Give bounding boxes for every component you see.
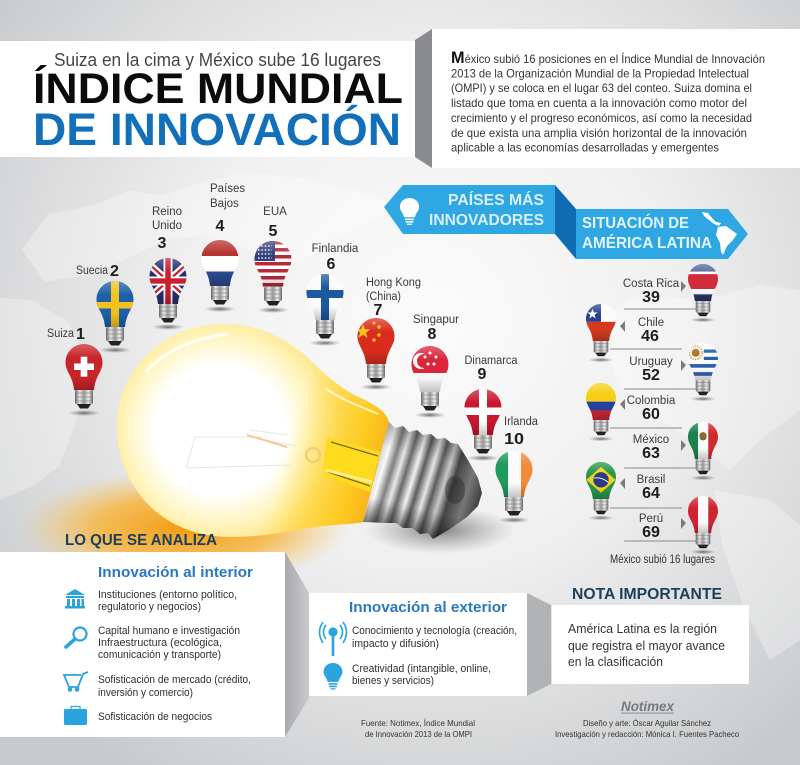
label: Finlandia 6 — [312, 243, 359, 273]
panel: nota importante — [552, 605, 749, 684]
Latin America: Brasil: 64 — [642, 485, 660, 502]
icon: Latin America map — [702, 212, 737, 255]
label: Reino Unido 3: Unido — [152, 220, 182, 232]
big light bulb — [117, 324, 515, 554]
Latin America: Colombia: 60 — [642, 406, 660, 423]
icon: magnifying glass — [66, 628, 86, 647]
panel: nota importante: que registra el mayor avance — [568, 638, 725, 653]
Latin America: Costa Rica: 39 — [642, 289, 660, 306]
label: EUA 5 — [263, 206, 287, 240]
Latin America: Perú: Perú — [639, 513, 663, 525]
panel: innovación al exterior: Conocimiento y tecnología (creación, — [352, 625, 517, 637]
label: Singapur 8: 8 — [428, 326, 437, 343]
panel: intro text: aplicable a las economías desarrolladas y emergentes — [451, 142, 719, 154]
title line 1: ÍNDICE MUNDIAL — [33, 65, 403, 113]
label: Hong Kong (China) 7: Hong Kong — [366, 277, 421, 289]
bulb screw base — [363, 422, 482, 539]
label: Suiza 1: 1 — [76, 326, 85, 343]
panel: innovación al interior: Innovación al interior — [98, 564, 253, 581]
icon: light bulb — [400, 198, 419, 225]
panel: intro text: listado que toma en cuenta a la innovación como motor del — [451, 97, 747, 110]
source credit: Fuente: Notimex, Índice Mundial — [361, 718, 475, 728]
bulb 7: Hong Kong (China) — [356, 318, 395, 390]
title line 2: DE INNOVACIÓN — [33, 104, 401, 155]
Latin America: Chile: 46 — [641, 328, 659, 345]
banner: países más innovadores — [384, 185, 576, 259]
label: EUA 5: 5 — [269, 223, 278, 240]
panel: innovación al interior: comunicación y transporte) — [98, 649, 221, 661]
panel: innovación al interior: inversión y comercio) — [98, 687, 193, 699]
banner: países más innovadores: PAÍSES MÁS — [448, 190, 544, 209]
Latin America: México — [624, 422, 719, 480]
source credit: de Innovación 2013 de la OMPI — [365, 729, 472, 739]
panel: nota importante: América Latina es la región — [568, 621, 717, 636]
label: Finlandia 6: Finlandia — [312, 243, 359, 255]
heading: lo que se analiza: LO QUE SE ANALIZA — [65, 532, 217, 549]
label: Finlandia 6: 6 — [327, 256, 336, 273]
panel: innovación al interior: regulatorio y negocios) — [98, 601, 201, 613]
panel: nota importante: en la clasificación — [568, 654, 663, 669]
bulb 6: Finlandia — [306, 274, 344, 346]
bulb 2: Suecia — [96, 281, 134, 353]
bulb 5: EUA — [254, 241, 292, 313]
design credits — [555, 718, 739, 739]
banner: países más innovadores: INNOVADORES — [429, 212, 544, 229]
label: Dinamarca 9: Dinamarca — [464, 355, 518, 367]
heading: nota importante: NOTA IMPORTANTE — [572, 586, 722, 603]
banner: situación de América Latina: SITUACIÓN DE — [582, 213, 689, 232]
label: Dinamarca 9 — [464, 355, 518, 383]
icon: briefcase — [64, 706, 87, 725]
panel: innovación al interior: Sofisticación de mercado (crédito, — [98, 674, 251, 686]
banner: situación de América Latina: AMÉRICA LATINA — [582, 233, 712, 252]
panel: innovación al interior: Sofisticación de negocios — [98, 711, 212, 723]
panel: intro text: crecimiento y el progreso económicos, así como la necesidad — [451, 112, 752, 125]
label: Países Bajos 4: 4 — [216, 218, 225, 235]
panel: intro text: 2013 de la Organización Mundial de la Propiedad Intelectual — [451, 68, 749, 80]
Latin America: Brasil: Brasil — [637, 474, 665, 486]
Latin America: Costa Rica — [623, 264, 718, 322]
icon: light bulb — [324, 663, 342, 689]
Latin America: México: México — [633, 434, 669, 446]
label: Reino Unido 3 — [152, 206, 182, 252]
Notimex logo: Notimex — [621, 698, 675, 714]
label: Singapur 8: Singapur — [413, 314, 459, 326]
label: Dinamarca 9: 9 — [478, 366, 487, 383]
bulb 10: Irlanda — [495, 451, 534, 523]
caption: México subió 16 lugares: México subió 16 lugares — [610, 554, 715, 566]
panel: innovación al interior: Infraestructura (ecológica, — [98, 637, 222, 649]
Latin America: Colombia: Colombia — [627, 395, 676, 407]
panel: intro text: de que exista una amplia visión horizontal de la innovación — [451, 127, 747, 140]
label: Irlanda 10: Irlanda — [504, 416, 539, 428]
label: Irlanda 10 — [504, 416, 539, 448]
label: EUA 5: EUA — [263, 206, 287, 218]
icon: shopping cart — [64, 672, 88, 691]
label: Irlanda 10: 10 — [504, 431, 524, 448]
Latin America: Colombia — [586, 383, 682, 441]
bulb 4: Países Bajos — [201, 240, 239, 312]
world map background — [0, 172, 800, 660]
label: Suiza 1: Suiza — [47, 328, 75, 340]
label: Países Bajos 4 — [210, 183, 245, 235]
label: Singapur 8 — [413, 314, 459, 343]
Latin America: Uruguay: 52 — [642, 367, 660, 384]
bulb 3: Reino Unido — [149, 258, 187, 330]
banner: situación de América Latina — [576, 209, 748, 259]
panel: innovación al interior — [0, 552, 309, 737]
label: Suecia 2: 2 — [110, 263, 119, 280]
panel: innovación al exterior: bienes y servicios) — [352, 675, 434, 687]
panel: intro text — [415, 29, 800, 168]
panel: innovación al interior: Capital humano e investigación — [98, 625, 240, 637]
panel: innovación al exterior: Innovación al exterior — [349, 599, 507, 616]
icon: antenna — [320, 622, 346, 656]
panel: innovación al exterior — [309, 593, 551, 696]
icon: institution building — [65, 589, 85, 608]
label: Hong Kong (China) 7 — [366, 277, 421, 319]
title panel — [0, 41, 415, 157]
bulb 1: Suiza — [65, 344, 103, 416]
label: Suiza 1 — [47, 326, 85, 343]
Latin America: Brasil — [586, 462, 682, 520]
label: Hong Kong (China) 7: 7 — [374, 302, 383, 319]
label: Países Bajos 4: Países — [210, 183, 245, 195]
design credits: Diseño y arte: Óscar Aguilar Sánchez — [583, 718, 711, 728]
label: Reino Unido 3: Reino — [152, 206, 182, 218]
label: Suecia 2 — [76, 263, 119, 280]
Latin America: Costa Rica: Costa Rica — [623, 278, 680, 290]
Latin America: Perú — [624, 496, 719, 554]
label: Reino Unido 3: 3 — [158, 235, 167, 252]
subtitle: Suiza en la cima y México sube 16 lugares — [54, 50, 381, 70]
Latin America: Chile — [586, 304, 682, 362]
Latin America: México: 63 — [642, 445, 660, 462]
bulb 9: Dinamarca — [464, 389, 502, 461]
Latin America: Uruguay — [624, 343, 718, 401]
orange glow under big bulb — [20, 470, 350, 586]
source credit — [361, 718, 475, 739]
panel: innovación al interior: Instituciones (entorno político, — [98, 589, 237, 601]
Latin America: Uruguay: Uruguay — [629, 356, 673, 368]
Latin America: Chile: Chile — [638, 317, 664, 329]
label: Hong Kong (China) 7: (China) — [366, 291, 401, 303]
label: Países Bajos 4: Bajos — [210, 198, 239, 210]
panel: innovación al exterior: impacto y difusión) — [352, 638, 439, 650]
Latin America: Perú: 69 — [642, 524, 660, 541]
panel: intro text: (OMPI) y se coloca en el lugar 63 del conteo. Suiza domina el — [451, 82, 752, 95]
panel: innovación al exterior: Creatividad (intangible, online, — [352, 663, 491, 675]
label: Suecia 2: Suecia — [76, 265, 109, 277]
design credits: Investigación y redacción: Mónica I. Fuentes Pacheco — [555, 729, 739, 739]
bulb 8: Singapur — [411, 346, 449, 418]
panel: intro text: México subió 16 posiciones en el Índice Mundial de Innovación — [451, 48, 765, 67]
